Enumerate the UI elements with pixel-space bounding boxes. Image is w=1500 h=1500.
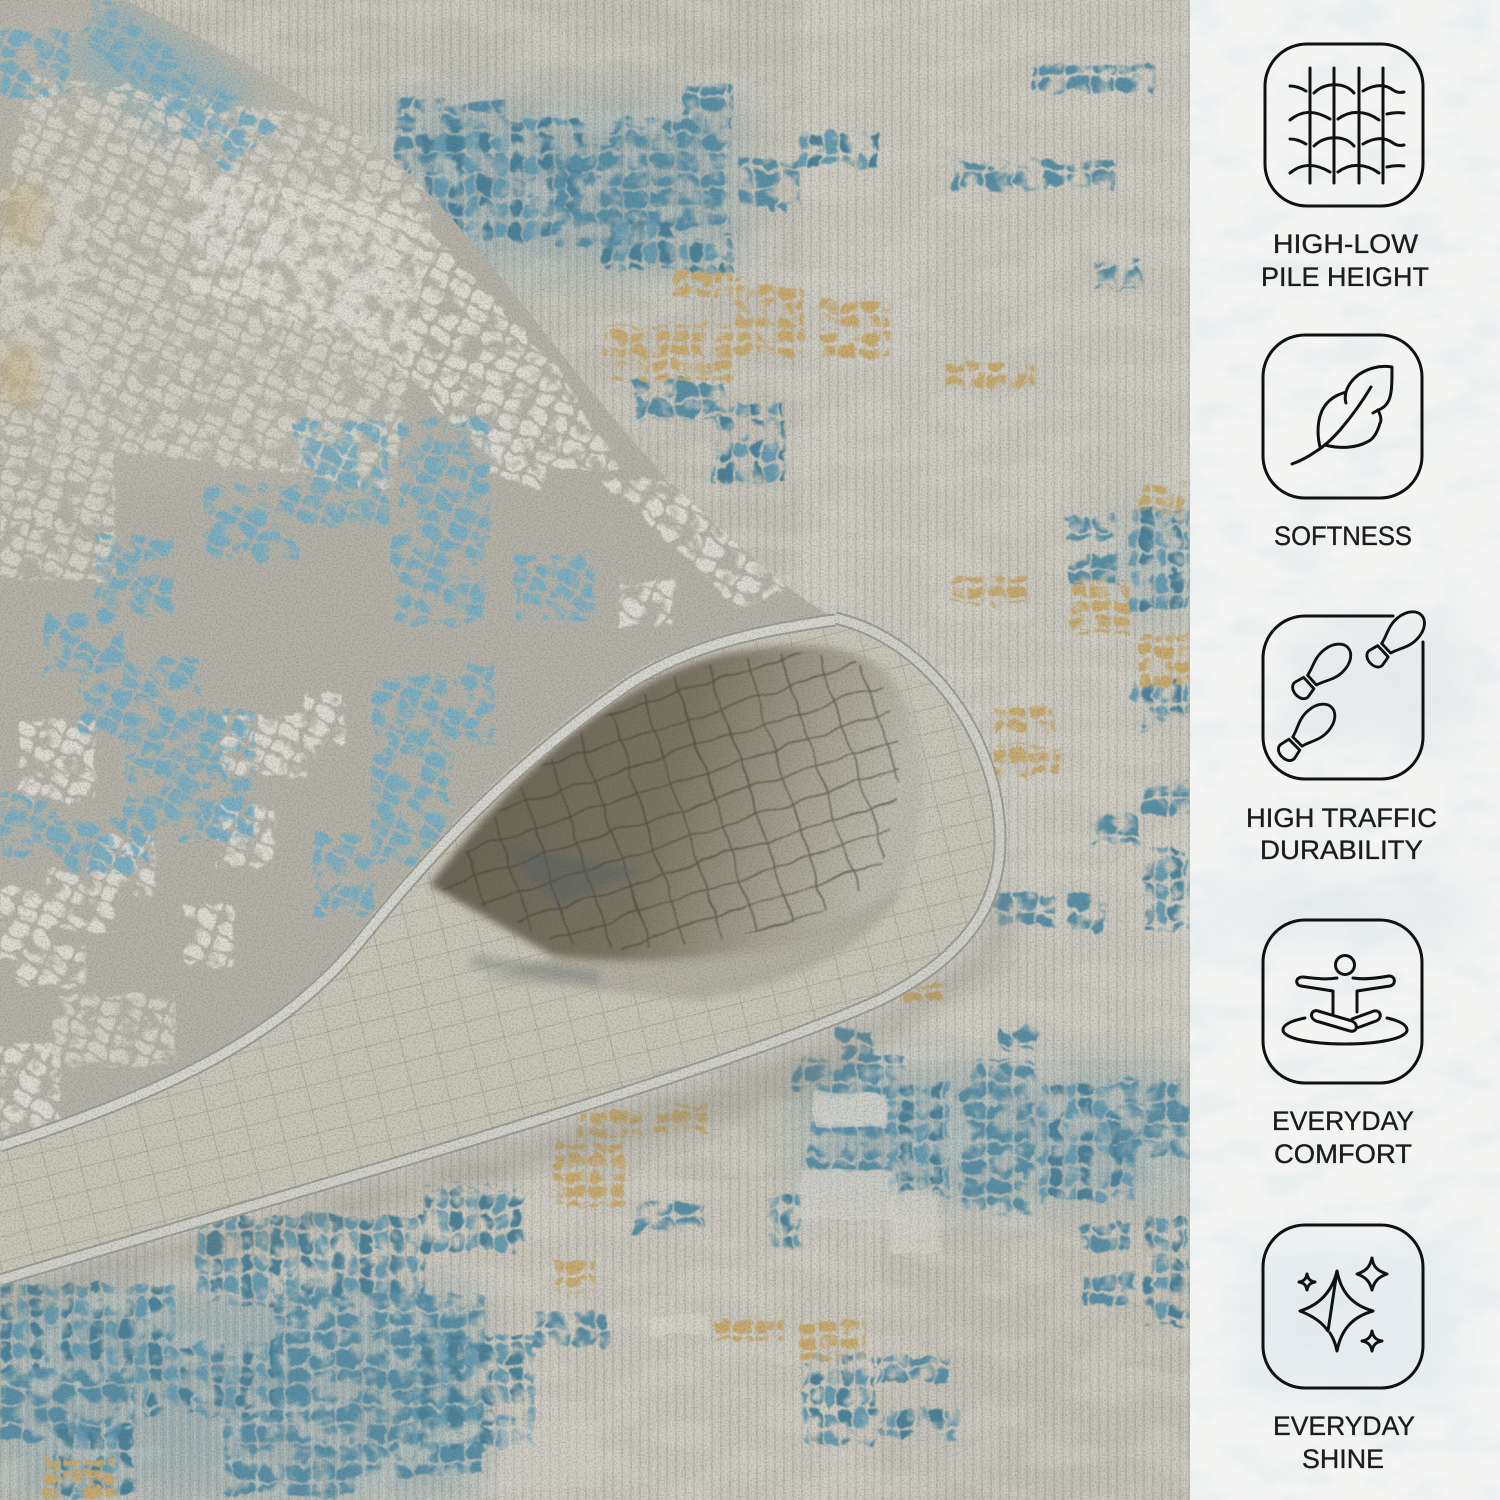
feature: softness (1263, 335, 1422, 551)
label: DURABILITY (1260, 835, 1423, 865)
label: PILE HEIGHT (1261, 262, 1429, 292)
label: HIGH TRAFFIC (1246, 803, 1437, 833)
icon: pile fibers (1265, 44, 1423, 206)
label: HIGH-LOW (1273, 229, 1419, 259)
feature: everyday comfort (1263, 920, 1422, 1169)
front face of rug (0, 0, 840, 1150)
label: SOFTNESS (1274, 521, 1412, 551)
white patches on floor (500, 1092, 940, 1490)
label: SHINE (1302, 1444, 1384, 1474)
fine rug grain (0, 0, 1190, 1500)
icon: seated figure (1263, 920, 1422, 1083)
feature: high-low pile height (1261, 44, 1429, 292)
feature: high traffic durability (1246, 605, 1437, 865)
background: floor rug (0, 0, 1190, 1500)
icon: feather (1263, 335, 1422, 498)
soft shadow under roll (0, 850, 1010, 1310)
underside of rug (0, 618, 1000, 1280)
binding edge (0, 618, 1000, 1280)
label: COMFORT (1274, 1139, 1412, 1169)
front binding edge (0, 620, 835, 1146)
label (1273, 1411, 1415, 1474)
side panel background (1190, 0, 1500, 1500)
label: EVERYDAY (1273, 1411, 1415, 1441)
gold patches on floor (45, 270, 1190, 1500)
icon: sparkles (1263, 1225, 1423, 1388)
rolled rug corner (0, 0, 1010, 1310)
icon: footprints (1263, 605, 1431, 779)
blue patches on floor (0, 65, 1190, 1495)
label (1246, 803, 1437, 865)
label (1261, 229, 1429, 292)
feature: everyday shine (1263, 1225, 1423, 1474)
label (1272, 1106, 1414, 1169)
label: EVERYDAY (1272, 1106, 1414, 1136)
dark inner crescent with grid (430, 645, 923, 964)
